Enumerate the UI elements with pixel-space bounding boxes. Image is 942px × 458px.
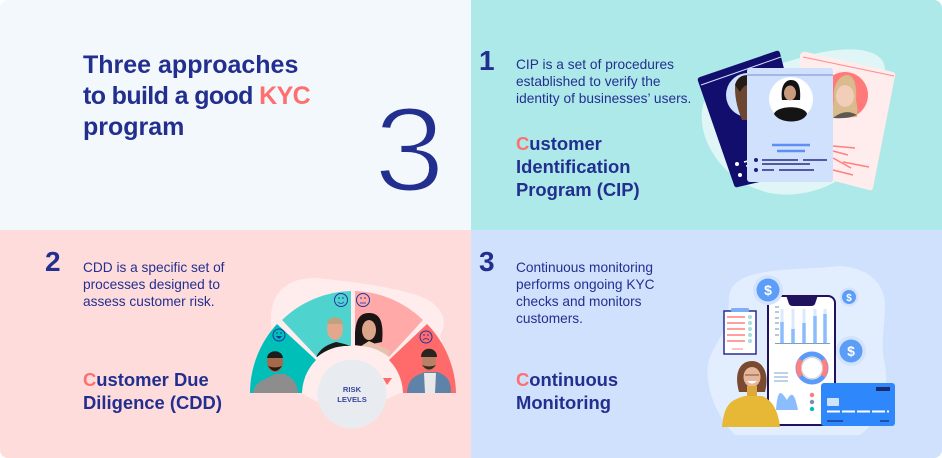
CDD description: processes designed to: [83, 277, 220, 292]
CIP heading: Program (CIP): [516, 179, 640, 200]
pointer: [383, 378, 392, 385]
segment: very low risk: [250, 324, 316, 393]
monitoring description: customers.: [516, 311, 583, 326]
segment: low risk: [282, 291, 351, 357]
CIP heading: Customer: [516, 133, 602, 154]
CIP description: CIP is a set of procedures: [516, 57, 674, 72]
monitoring description: performs ongoing KYC: [516, 277, 654, 292]
illustration: ID cards: [698, 49, 896, 195]
CDD description: CDD is a specific set of: [83, 260, 224, 275]
title: Three approaches: [83, 51, 298, 79]
hub: risk levels: RISK: [343, 385, 362, 394]
monitoring heading: [516, 369, 618, 413]
coins: $: [847, 343, 855, 359]
CIP heading: [516, 133, 640, 200]
navy card: [698, 51, 810, 187]
monitoring description: [516, 260, 654, 326]
CIP description: [516, 57, 691, 106]
monitoring heading: Continuous: [516, 369, 618, 390]
clipboard: [724, 308, 756, 354]
hub: risk levels: [318, 360, 386, 428]
hub: risk levels: LEVELS: [337, 395, 367, 404]
number 2: 2: [45, 246, 61, 277]
credit card: [821, 383, 895, 426]
blue card: [747, 68, 833, 182]
monitoring heading: Monitoring: [516, 392, 611, 413]
pink card: [800, 52, 895, 190]
CIP description: identity of businesses’ users.: [516, 91, 691, 106]
segment: high risk: [389, 324, 456, 393]
coins: [753, 275, 866, 366]
illustration: risk level gauge: [250, 278, 456, 428]
title: [83, 51, 310, 141]
monitoring description: Continuous monitoring: [516, 260, 653, 275]
CDD heading: Diligence (CDD): [83, 392, 222, 413]
panel: CDD: [0, 230, 471, 458]
CDD heading: [83, 369, 222, 413]
CDD description: [83, 260, 224, 309]
panel: continuous monitoring: [471, 230, 942, 458]
title: program: [83, 113, 184, 141]
monitoring description: checks and monitors: [516, 294, 642, 309]
coins: $: [846, 293, 852, 304]
coins: $: [764, 282, 772, 298]
panel: intro: [0, 0, 471, 230]
phone: [768, 295, 835, 425]
CIP heading: Identification: [516, 156, 630, 177]
panel: CIP: [471, 0, 942, 230]
large numeral 3: 3: [374, 83, 445, 217]
title: to build a good KYC: [83, 82, 310, 110]
CDD heading: Customer Due: [83, 369, 209, 390]
segment: medium risk: [355, 291, 423, 360]
number 3: 3: [479, 246, 495, 277]
woman: [722, 361, 780, 427]
CDD description: assess customer risk.: [83, 294, 215, 309]
illustration: monitoring app: [708, 266, 895, 435]
number 1: 1: [479, 45, 495, 76]
CIP description: established to verify the: [516, 74, 661, 89]
